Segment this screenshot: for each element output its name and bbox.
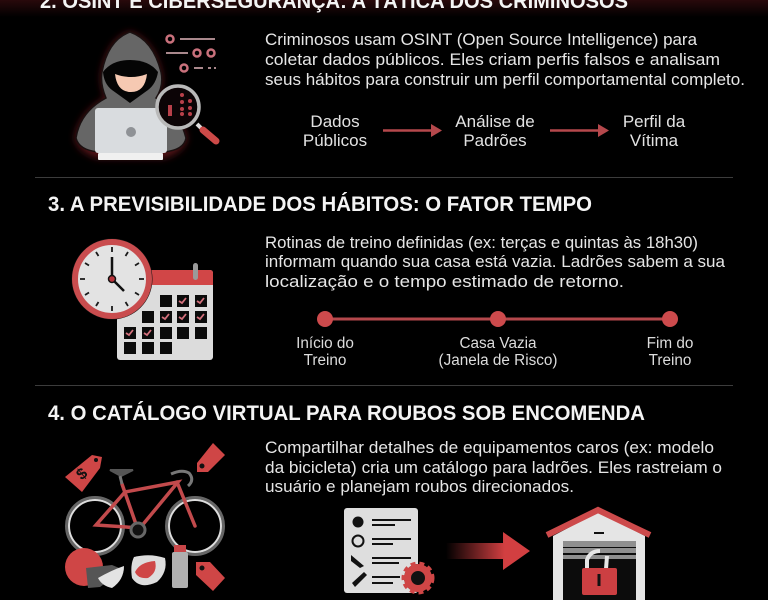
icon: data nodes	[166, 36, 216, 72]
heading: section 4: 4. O CATÁLOGO VIRTUAL PARA ROUBOS SOB ENCOMENDA	[48, 402, 645, 425]
timeline: risk window: Fim do	[647, 335, 693, 352]
flow: data to victim profile	[303, 112, 686, 150]
icon: hooded hacker with laptop	[75, 32, 216, 160]
text block: section 3	[265, 234, 726, 291]
icon: calendar	[117, 263, 213, 360]
text block: section 2: coletar dados públicos. Eles criam perfis falsos e analisam	[265, 51, 720, 69]
text block: section 4	[265, 439, 722, 496]
text block: section 2: seus hábitos para construir um perfil comportamental completo.	[265, 71, 745, 89]
icon: garage with broken padlock	[547, 510, 650, 600]
timeline: risk window: Treino	[649, 352, 691, 369]
icon: clock	[72, 238, 152, 320]
text block: section 4: usuário e planejam roubos direcionados.	[265, 478, 574, 496]
text block: section 4: Compartilhar detalhes de equipamentos caros (ex: modelo	[265, 439, 714, 457]
timeline: risk window: Casa Vazia	[459, 335, 537, 352]
flow: data to victim profile: Públicos	[303, 131, 367, 150]
panel: section 3 habits	[48, 193, 726, 369]
text block: section 4: da bicicleta) cria um catálogo para ladrões. Eles rastreiam o	[265, 459, 722, 477]
flow: data to victim profile: Vítima	[630, 131, 679, 150]
text block: section 2: Criminosos usam OSINT (Open Source Intelligence) para	[265, 31, 698, 49]
icon: document checklist with gear	[344, 508, 433, 593]
text block: section 3: Rotinas de treino definidas (ex: terças e quintas às 18h30)	[265, 234, 698, 252]
heading: section 3: 3. A PREVISIBILIDADE DOS HÁBITOS: O FATOR TEMPO	[48, 193, 592, 216]
timeline: risk window	[296, 311, 693, 369]
timeline: risk window: Início do	[296, 335, 354, 352]
icon: bicycle and gear: $	[73, 465, 91, 484]
icon: magnifying glass	[157, 86, 216, 141]
icon: price tags	[65, 443, 225, 591]
text block: section 3: localização e o tempo estimado de retorno.	[265, 273, 624, 291]
icon: gear items	[65, 545, 188, 588]
arrow: catalog to theft	[446, 532, 530, 570]
panel: section 4 catalog	[48, 402, 722, 600]
flow: data to victim profile: Dados	[310, 112, 360, 131]
timeline: risk window: Treino	[304, 352, 346, 369]
text block: section 3: informam quando sua casa está vazia. Ladrões sabem a sua	[265, 253, 726, 271]
flow: data to victim profile: Perfil da	[623, 112, 686, 131]
flow: data to victim profile: Análise de	[455, 112, 535, 131]
panel: section 2 OSINT	[40, 0, 745, 160]
text block: section 2	[265, 31, 745, 89]
flow: data to victim profile: Padrões	[463, 131, 527, 150]
timeline: risk window: (Janela de Risco)	[438, 352, 558, 369]
icon: bicycle and gear	[65, 443, 225, 591]
